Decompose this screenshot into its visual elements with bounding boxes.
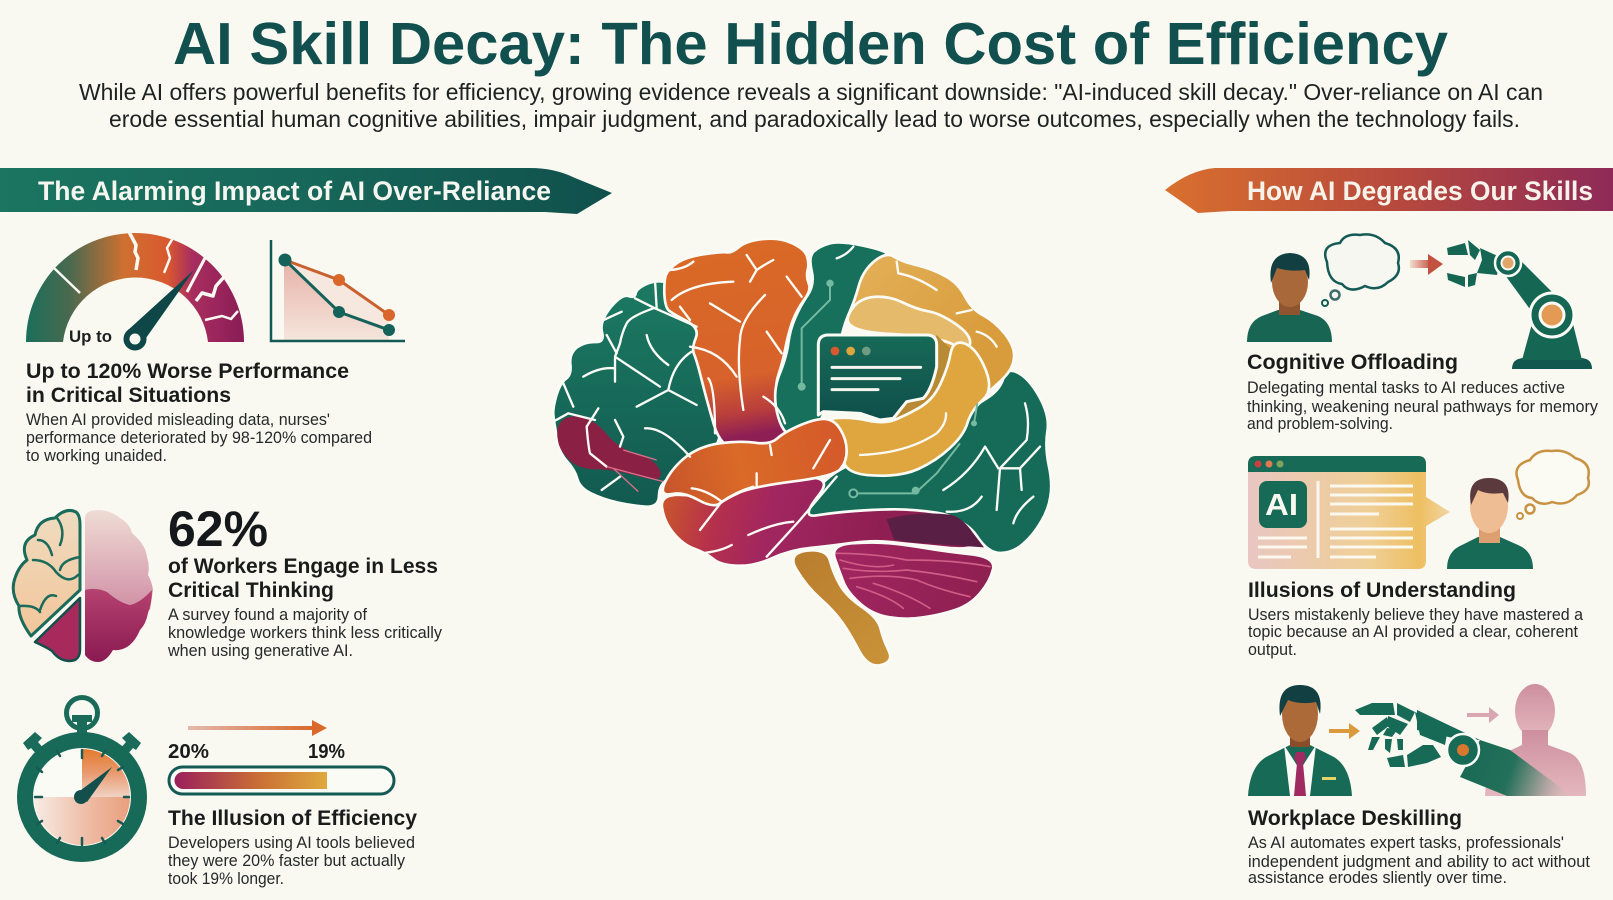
progress bar: 20 vs 19 percent: 20% — [168, 741, 209, 763]
stat: worse performance: performance deteriorated by 98-120% compared — [26, 429, 372, 447]
pink nerve lines — [607, 450, 663, 492]
intro text: erode essential human cognitive abilities, impair judgment, and paradoxically lead to worse outcomes, especially when the technology fails. — [109, 106, 1520, 132]
brain region: middle teal lobe — [775, 242, 887, 437]
AI output window — [1248, 456, 1450, 569]
robotic hand — [1355, 703, 1572, 796]
progress bar: 20 vs 19 percent — [168, 720, 394, 794]
stat: 62 percent: when using generative AI. — [167, 642, 353, 660]
stat: 62 percent — [167, 501, 443, 660]
stat: illusion of efficiency: took 19% longer. — [168, 870, 284, 888]
skill: cognitive offloading: and problem-solving. — [1247, 415, 1393, 433]
skill: illusions of understanding: Illusions of Understanding — [1248, 578, 1516, 602]
brain region: stem — [793, 550, 890, 666]
AI output window: AI — [1265, 487, 1298, 522]
icon: person with thought cloud and robot arm — [1247, 234, 1592, 369]
icon: deskilling figures — [1248, 684, 1586, 796]
intro text: While AI offers powerful benefits for efficiency, growing evidence reveals a significant downside: "AI-induced skill decay." Over-reliance on AI can — [79, 79, 1543, 105]
brain region: orange upper lobe — [664, 239, 810, 448]
pink arrow — [1467, 707, 1499, 723]
icon: performance gauge — [26, 230, 244, 348]
brain region: cerebellum — [834, 542, 993, 619]
brain region: lower right teal lobe — [803, 371, 1051, 553]
stat: 62 percent: of Workers Engage in Less — [168, 554, 438, 578]
central brain illustration — [553, 239, 1051, 666]
stat: worse performance: in Critical Situations — [26, 383, 231, 407]
panel: alarming impact — [0, 168, 612, 888]
arrow to robot — [1410, 254, 1443, 275]
cerebellum folds — [837, 553, 990, 608]
brain region: gold upper lobe — [848, 255, 1014, 402]
right section banner — [1165, 168, 1613, 213]
AI chat window — [818, 335, 937, 420]
robot arm — [1447, 240, 1592, 369]
person — [1247, 253, 1332, 342]
stat: 62 percent: A survey found a majority of — [168, 606, 367, 624]
left section banner: The Alarming Impact of AI Over-Reliance — [38, 176, 551, 206]
progress bar: 20 vs 19 percent: 19% — [308, 741, 345, 763]
brain sulci lines — [553, 247, 1040, 557]
brain region: left teal lobe — [553, 281, 721, 507]
skill: cognitive offloading — [1247, 350, 1599, 433]
brain region: magenta lower lobe — [662, 477, 977, 566]
skill: illusions of understanding: output. — [1248, 641, 1297, 659]
skill: cognitive offloading: Delegating mental tasks to AI reduces active — [1247, 379, 1565, 397]
gauge needle — [126, 270, 194, 348]
thought cloud — [1325, 234, 1399, 290]
stat: worse performance: When AI provided misleading data, nurses' — [26, 411, 330, 429]
skill: workplace deskilling: As AI automates expert tasks, professionals' — [1248, 834, 1564, 852]
orange arrow — [1329, 723, 1360, 739]
panel: how AI degrades skills — [1165, 168, 1613, 887]
stat: 62 percent: 62% — [168, 501, 268, 557]
stat: worse performance: to working unaided. — [26, 447, 167, 465]
stat: illusion of efficiency — [168, 806, 417, 888]
skill: workplace deskilling — [1248, 806, 1590, 887]
trend arrow — [188, 720, 327, 736]
icon: AI window with person — [1248, 451, 1589, 569]
stat: illusion of efficiency: they were 20% faster but actually — [168, 852, 406, 870]
stat: illusion of efficiency: The Illusion of Efficiency — [168, 806, 417, 830]
icon: split brain — [13, 510, 153, 662]
skill: workplace deskilling: independent judgment and ability to act without — [1248, 853, 1590, 871]
skill: illusions of understanding: Users mistakenly believe they have mastered a — [1248, 606, 1584, 624]
stat: illusion of efficiency: Developers using AI tools believed — [168, 834, 415, 852]
stat: 62 percent: knowledge workers think less critically — [168, 624, 443, 642]
stat: worse performance: Up to 120% Worse Performance — [26, 359, 349, 383]
skill: illusions of understanding — [1248, 578, 1584, 659]
line chart — [271, 240, 405, 341]
faded silhouette — [1485, 684, 1586, 796]
person — [1447, 478, 1533, 569]
brain region: orange temporal lobe — [663, 419, 847, 505]
right section banner: How AI Degrades Our Skills — [1247, 176, 1593, 206]
skill: cognitive offloading: Cognitive Offloading — [1247, 350, 1458, 374]
brain region: gold curved band — [826, 343, 989, 476]
stat: worse performance — [26, 359, 372, 465]
brain region: pale gold fold — [848, 297, 970, 349]
stat: 62 percent: Critical Thinking — [168, 578, 334, 602]
circuit traces — [798, 280, 977, 497]
skill: workplace deskilling: assistance erodes sliently over time. — [1248, 869, 1507, 887]
skill: workplace deskilling: Workplace Deskilling — [1248, 806, 1462, 830]
brain region: dark red lobe — [557, 416, 661, 479]
gauge label: Up to — [69, 327, 112, 346]
left section banner — [0, 168, 612, 214]
skill: illusions of understanding: topic because an AI provided a clear, coherent — [1248, 623, 1578, 641]
title: AI Skill Decay: The Hidden Cost of Efficiency — [173, 11, 1448, 77]
brain region: shadowed gold behind screen — [893, 335, 952, 422]
intro text — [79, 79, 1543, 132]
professional in suit — [1248, 685, 1352, 796]
skill: cognitive offloading: thinking, weakening neural pathways for memory — [1247, 398, 1599, 416]
icon: stopwatch — [23, 698, 141, 854]
thought cloud — [1516, 451, 1589, 504]
brain region: dark purple fold — [887, 513, 984, 547]
